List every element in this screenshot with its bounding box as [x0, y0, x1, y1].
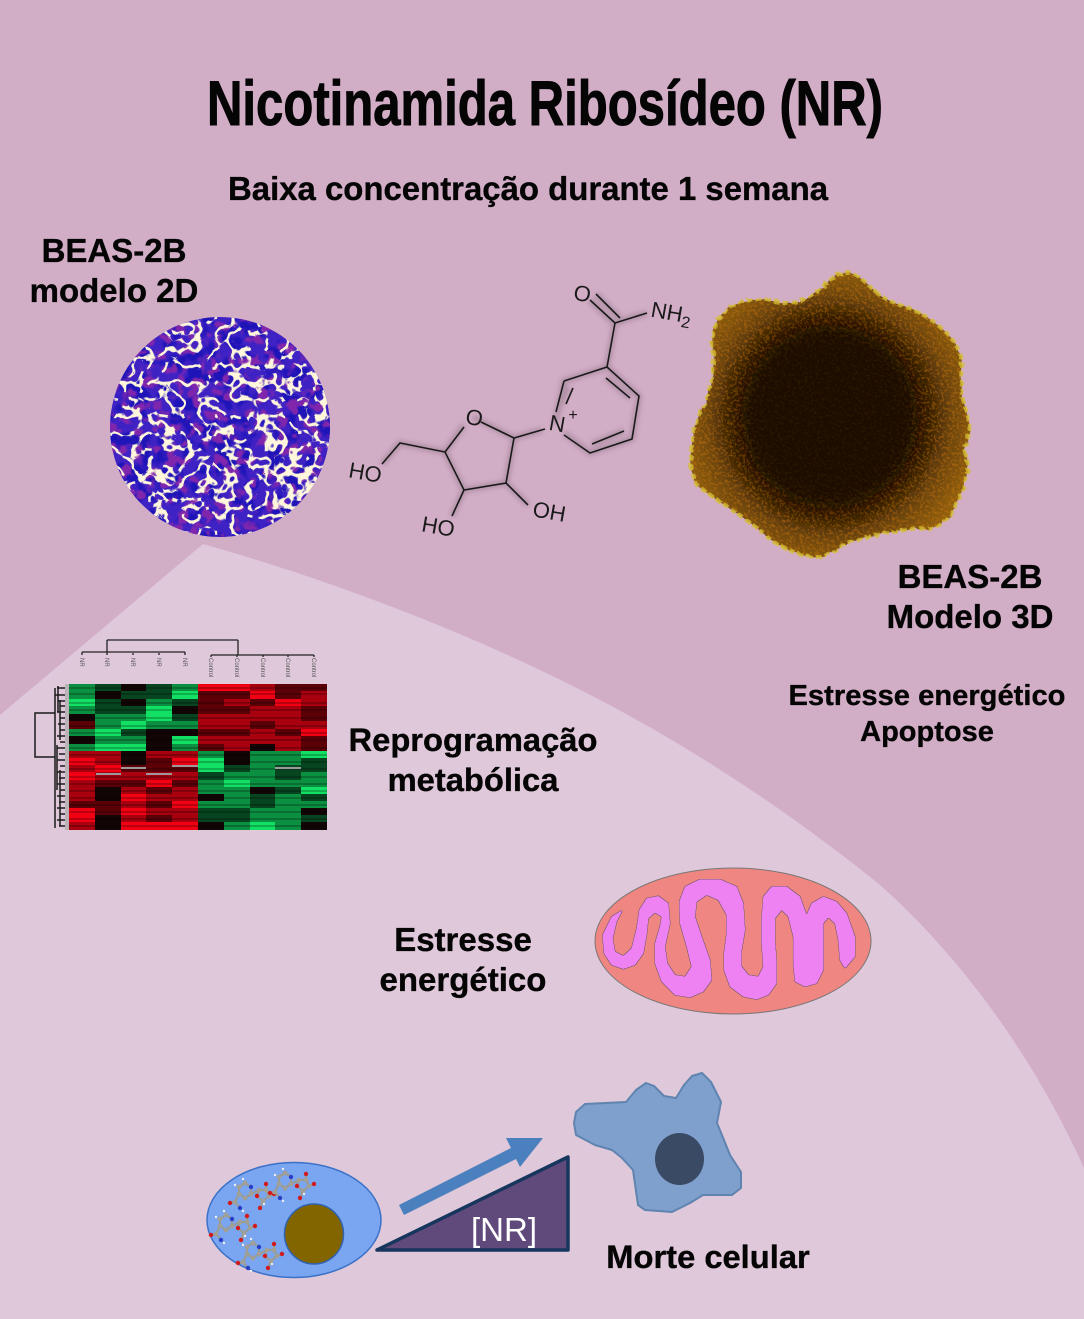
- label: BEAS-2B modelo 2D: modelo 2D: [30, 272, 198, 309]
- column labels: NR: [129, 658, 135, 667]
- molecule: nicotinamide riboside: NH: [649, 297, 685, 327]
- molecule: nicotinamide riboside: 2: [680, 314, 692, 332]
- molecule: nicotinamide riboside: HO: [347, 457, 384, 488]
- image: 2D cell micrograph: [110, 317, 330, 537]
- panel: lower light curved area: [0, 544, 1084, 1319]
- label: BEAS-2B Modelo 3D: Modelo 3D: [887, 598, 1053, 635]
- column labels: NR: [181, 658, 187, 667]
- image: 3D spheroid micrograph: [688, 270, 972, 560]
- molecule: nicotinamide riboside: HO: [420, 511, 457, 542]
- label: Reprogramação metabólica: [349, 721, 597, 798]
- heatmap cells: [69, 684, 327, 830]
- row dendrogram: [35, 686, 66, 828]
- column labels: Control: [284, 658, 290, 677]
- triangle: NR gradient: [377, 1157, 568, 1250]
- column labels: Control: [233, 658, 239, 677]
- label: Estresse energético: Estresse: [394, 921, 532, 958]
- column labels: Control: [310, 658, 316, 677]
- label: 3D outcomes: [788, 680, 1066, 748]
- arrow: [399, 1138, 543, 1215]
- column labels: Control: [207, 658, 213, 677]
- label: BEAS-2B modelo 2D: [30, 232, 198, 309]
- molecule: nicotinamide riboside: O: [572, 280, 593, 307]
- molecule: nicotinamide riboside: N: [547, 410, 567, 437]
- molecule: nicotinamide riboside: OH: [531, 496, 568, 527]
- column labels: NR: [78, 658, 84, 667]
- icon: mitochondrion: [595, 868, 871, 1014]
- triangle: NR gradient: [NR]: [471, 1211, 537, 1248]
- molecule: nicotinamide riboside: [347, 280, 694, 542]
- chart: heatmap: [35, 640, 327, 830]
- molecule: nicotinamide riboside: O: [464, 404, 485, 431]
- label: BEAS-2B modelo 2D: BEAS-2B: [42, 232, 186, 269]
- column labels: NR: [155, 658, 161, 667]
- missing-value marks: [96, 766, 301, 774]
- icon: dying cell: [574, 1073, 741, 1212]
- label: BEAS-2B Modelo 3D: BEAS-2B: [898, 558, 1042, 595]
- molecule: nicotinamide riboside: +: [568, 407, 578, 424]
- label: Reprogramação metabólica: metabólica: [388, 761, 559, 798]
- icon: cell with NR molecules: [207, 1162, 381, 1278]
- title: Nicotinamida Ribosídeo (NR): [207, 69, 883, 139]
- subtitle: Baixa concentração durante 1 semana: [228, 170, 829, 207]
- column labels: NR: [103, 658, 109, 667]
- label: Estresse energético: energético: [380, 961, 546, 998]
- label: Estresse energético: [380, 921, 546, 998]
- label: 3D outcomes: Estresse energético: [788, 680, 1066, 712]
- column labels: [78, 658, 316, 677]
- label: Reprogramação metabólica: Reprogramação: [349, 721, 597, 758]
- label: 3D outcomes: Apoptose: [860, 716, 994, 748]
- label: Morte celular: Morte celular: [606, 1238, 810, 1275]
- label: BEAS-2B Modelo 3D: [887, 558, 1053, 635]
- stripes: [69, 688, 327, 826]
- row labels strip: [65, 684, 69, 830]
- column labels: Control: [259, 658, 265, 677]
- column dendrogram: [82, 640, 314, 657]
